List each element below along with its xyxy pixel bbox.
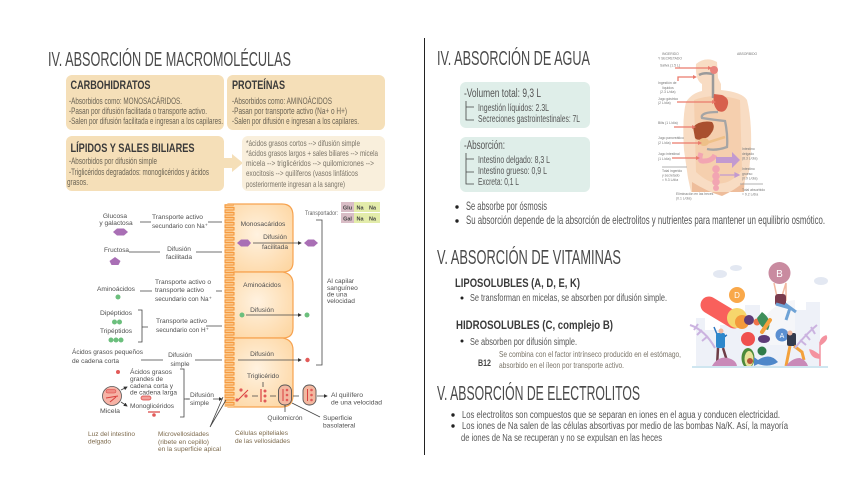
labels: luminal substrates (72, 213, 177, 417)
icon: micelle (100, 386, 127, 415)
section: water-soluble (456, 318, 681, 370)
cell contents and exit routes: Difusión (250, 307, 274, 314)
title: macromolecules: IV. ABSORCIÓN DE MACROMOLÉCULAS (48, 48, 291, 71)
box: carbohydrates: CARBOHIDRATOS (70, 80, 151, 92)
illustration: digestive system: Jugo pancreático (658, 136, 684, 140)
illustration: digestive system: (0.9 L/día) (742, 176, 757, 180)
illustration: digestive system: Y SECRETADO (658, 56, 682, 60)
illustration: digestive system: y secretado (662, 174, 680, 178)
labels: transport mechanisms: secundario con Na⁺ (152, 223, 208, 230)
box: total volume: -Volumen total: 9,3 L (464, 88, 541, 100)
labels: luminal substrates: Dipéptidos (100, 310, 133, 317)
labels: transport mechanisms: simple (170, 361, 190, 368)
labels: transport mechanisms: Difusión (190, 392, 214, 399)
labels: transport mechanisms: simple (190, 400, 209, 407)
labels: luminal substrates: de cadena larga (130, 390, 177, 396)
chart: absorption pathways diagram (72, 202, 382, 453)
labels: exits and anatomy: Microvellosidades (158, 431, 210, 438)
bullets: electrolytes: de iones de Na se recuperan y no se expulsan en las heces (461, 433, 662, 444)
section: water-soluble: HIDROSOLUBLES (C, complejo B) (456, 318, 613, 332)
box: absorption: Intestino delgado: 8,3 L (478, 155, 550, 166)
labels: luminal substrates: Tripéptidos (100, 328, 133, 335)
labels: transport mechanisms: secundario con Na⁺ (155, 296, 212, 303)
table: transporter: Na (356, 216, 364, 222)
box: lipids and bile salts: grasos. (67, 177, 88, 187)
bullets: electrolytes (451, 410, 788, 444)
labels: luminal substrates: Ácidos grasos (130, 367, 173, 376)
box: lipids and bile salts (66, 136, 224, 191)
labels: exits and anatomy (88, 220, 382, 453)
box: lipid detail: exocitosis --> quilíferos (vasos linfáticos (246, 168, 358, 178)
box: lipid detail: micela --> triglicéridos --> quilomicrones --> (246, 158, 374, 168)
illustration: digestive system: Total absorbido (742, 188, 765, 192)
labels: luminal substrates: Glucosa (103, 213, 127, 220)
section: water-soluble: Se absorben por difusión simple. (470, 337, 577, 348)
panel: macromolecules (48, 48, 385, 453)
labels: luminal substrates: cadena corta y (130, 383, 174, 390)
labels: transport mechanisms: Transporte activo (156, 318, 207, 325)
labels: exits and anatomy: Superficie (323, 415, 353, 422)
illustration: digestive system: Saliva (1.5 L) (660, 64, 680, 68)
labels: exits and anatomy: Al quilífero (331, 392, 363, 399)
box: proteins: -Pasan por transporte activo (Na+ o H+) (232, 106, 347, 116)
box: carbohydrates: -Absorbidos como: MONOSACÁRIDOS. (69, 96, 182, 106)
table: transporter (305, 202, 380, 223)
title: water: IV. ABSORCIÓN DE AGUA (437, 47, 590, 70)
box: lipids and bile salts: -Absorbidos por difusión simple (69, 156, 157, 166)
cell contents and exit routes: Triglicérido (247, 373, 279, 380)
labels: transport mechanisms: Difusión (168, 352, 192, 359)
labels: exits and anatomy: de una (327, 292, 348, 298)
labels: transport mechanisms: facilitada (166, 254, 192, 261)
labels: exits and anatomy: Luz del intestino (88, 431, 135, 438)
cell contents and exit routes: Aminoácidos (243, 282, 282, 289)
labels: luminal substrates: Monoglicéridos (130, 403, 175, 410)
illustration: digestive system: = 9.2 L/día (742, 192, 758, 196)
box: proteins: PROTEÍNAS (232, 79, 285, 92)
illustration: digestive system: (0.1 L/día) (676, 196, 691, 200)
illustration: digestive system: Ingestión de (658, 81, 677, 85)
panel: water absorption (437, 47, 825, 227)
illustration: digestive system: Eliminación en las heces (676, 192, 714, 196)
illustration: digestive system: ABSORBIDO (737, 52, 758, 56)
table: transporter: Gal (343, 216, 352, 222)
cell contents and exit routes: Difusión (263, 234, 287, 241)
illustration: digestive system: (8.3 L/día) (742, 156, 757, 160)
box: carbohydrates: -Salen por difusión facilitada e ingresan a los capilares. (69, 116, 223, 126)
illustration: digestive system: Jugo gástrico (658, 97, 678, 101)
box: lipid detail: posteriormente ingresan a la sangre) (246, 179, 345, 189)
labels: exits and anatomy: de las vellosidades (235, 438, 291, 445)
labels: luminal substrates: Ácidos grasos pequeños (72, 347, 144, 356)
box: absorption: Excreta: 0,1 L (478, 177, 519, 188)
labels: luminal substrates: Fructosa (104, 247, 129, 254)
labels: exits and anatomy: sanguíneo (327, 285, 358, 292)
box: proteins: -Absorbidos como: AMINOÁCIDOS (232, 96, 332, 106)
box: absorption (460, 137, 590, 192)
panel: vitamins (437, 246, 828, 370)
cell contents and exit routes: Monosacáridos (241, 221, 286, 228)
box: proteins: -Salen por difusión e ingresan a los capilares. (232, 116, 359, 126)
icon: chylomicrons (278, 385, 316, 405)
labels: luminal substrates: de cadena corta (72, 358, 119, 365)
labels: luminal substrates: Aminoácidos (97, 286, 136, 293)
illustration: digestive system: Intestino (742, 147, 755, 151)
labels: exits and anatomy: delgado (88, 438, 111, 446)
illustration: digestive system (658, 52, 765, 200)
table: transporter: Glu (343, 206, 352, 212)
icon: micelle: Micela (100, 408, 120, 415)
illustration: vitamins and foods: A (780, 333, 785, 340)
section: fat-soluble: Se transforman en micelas, se absorben por difusión simple. (470, 293, 667, 304)
labels: transport mechanisms (152, 214, 214, 407)
box: proteins (227, 75, 385, 130)
box: lipid detail: *ácidos grasos cortos --> difusión simple (246, 138, 360, 148)
labels: transport mechanisms: Difusión (167, 246, 191, 253)
labels: exits and anatomy: Quilomicrón (267, 415, 303, 422)
epithelial cells (225, 204, 293, 407)
labels: exits and anatomy: velocidad (327, 298, 355, 305)
arrows: transport mechanisms (129, 222, 222, 417)
section: water-soluble: Se combina con el factor intrínseco producido en el estómago, (499, 349, 681, 359)
box: absorption: -Absorción: (464, 140, 505, 152)
table: transporter: Na (356, 206, 364, 212)
illustration: digestive system: Intestino (742, 167, 755, 171)
labels: exits and anatomy: en la superficie apical (158, 446, 222, 453)
cell contents and exit routes: facilitada (262, 244, 288, 251)
illustration: digestive system: (2.3 L/día) (660, 90, 675, 94)
divider (424, 38, 426, 455)
labels: luminal substrates: grandes de (130, 376, 163, 383)
table: transporter: Na (369, 216, 377, 222)
bullets: water (455, 199, 825, 227)
illustration: digestive system: = 9.3 L/día (662, 178, 678, 182)
labels: exits and anatomy: (ribete en cepillo) (158, 439, 209, 446)
box: lipid detail (242, 136, 385, 191)
section: water-soluble: B12 (478, 358, 491, 369)
illustration: vitamins and foods (690, 262, 828, 368)
panel: electrolytes (437, 382, 788, 444)
box: carbohydrates: -Pasan por difusión facilitada o transporte activo. (69, 106, 207, 116)
illustration: digestive system: (2 L/día) (658, 101, 671, 105)
box: total volume: Secreciones gastrointestinales: 7L (478, 114, 580, 125)
illustration: digestive system: grueso (742, 172, 752, 176)
box: total volume: Ingestión líquidos: 2.3L (478, 103, 549, 114)
illustration: vitamins and foods: B (776, 269, 783, 280)
box: absorption: Intestino grueso: 0,9 L (478, 166, 547, 177)
illustration: digestive system: Total ingerido (662, 169, 682, 173)
illustration: digestive system: INGERIDO (662, 52, 679, 56)
illustration: vitamins and foods: D (734, 291, 740, 300)
box: lipids and bile salts: -Triglicéridos degradados: monoglicéridos y ácidos (69, 167, 209, 177)
box: carbohydrates (66, 75, 224, 130)
illustration: digestive system: Bilis (1 L/día) (658, 121, 678, 125)
labels: transport mechanisms: Transporte activo o (155, 279, 211, 286)
labels: exits and anatomy: basolateral (323, 422, 356, 430)
box: lipid detail: *ácidos grasos largos + sales biliares --> micela (246, 148, 378, 158)
labels: exits and anatomy: Células epiteliales (235, 430, 289, 437)
arrow: lipids to detail (224, 154, 243, 172)
box: lipids and bile salts: LÍPIDOS Y SALES BILIARES (70, 142, 195, 155)
section: fat-soluble (455, 276, 667, 304)
title: electrolytes: V. ABSORCIÓN DE ELECTROLITOS (437, 382, 640, 405)
labels: luminal substrates: y galactosa (99, 220, 133, 227)
cell contents and exit routes (235, 221, 327, 402)
box: total volume (460, 82, 590, 128)
illustration: digestive system: (2 L/día) (658, 141, 671, 145)
table: transporter: Na (369, 206, 377, 212)
bullets: water: Se absorbe por ósmosis (466, 199, 547, 213)
labels: exits and anatomy: de una velocidad (331, 400, 382, 406)
illustration: digestive system: Jugo intestinal (658, 152, 680, 156)
table: transporter: Transportador: (305, 210, 338, 217)
labels: transport mechanisms: secundario con H⁺ (156, 327, 210, 334)
illustration: digestive system: líquidos (662, 86, 674, 90)
illustration: digestive system: delgado (742, 152, 754, 156)
section: water-soluble: absorbido en el íleon por transporte activo. (499, 360, 624, 370)
labels: transport mechanisms: Transporte activo (152, 214, 203, 221)
labels: exits and anatomy: Al capilar (327, 278, 355, 285)
cell contents and exit routes: Difusión (250, 351, 274, 358)
title: vitamins: V. ABSORCIÓN DE VITAMINAS (437, 246, 621, 269)
illustration: digestive system: (1 L/día) (658, 157, 671, 161)
section: fat-soluble: LIPOSOLUBLES (A, D, E, K) (455, 276, 580, 290)
labels: transport mechanisms: transporte activo (155, 287, 204, 294)
